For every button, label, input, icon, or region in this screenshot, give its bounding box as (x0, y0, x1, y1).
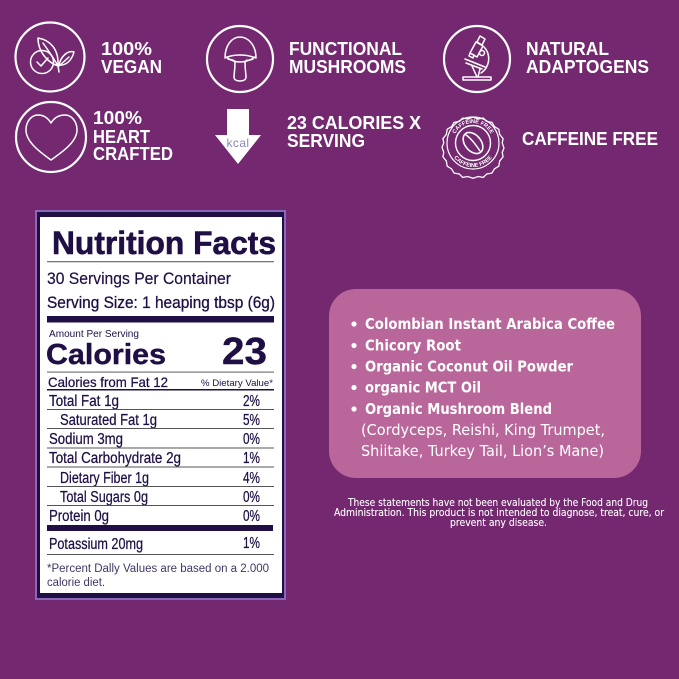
label: natural adaptogens: NATURAL (526, 39, 609, 59)
table: nutrient rows: Saturated Fat 1g (60, 412, 157, 429)
text: servings: 30 Servings Per Container (47, 269, 231, 288)
table: nutrient rows: 5% (243, 412, 260, 429)
badge: functional mushrooms (207, 26, 406, 92)
label: 100% vegan: 100% (101, 39, 152, 59)
list: ingredient bullets: Chicory Root (365, 336, 461, 354)
label: functional mushrooms (289, 39, 406, 77)
table: nutrient rows: Dietary Fiber 1g (60, 470, 149, 487)
text: calories (46, 328, 267, 373)
icon: vegan leaves (16, 22, 84, 92)
badge: 23 calories per serving (215, 109, 421, 164)
list: ingredient bullets: Organic Coconut Oil Powder (365, 358, 573, 376)
list: ingredient bullets: Organic Mushroom Blend (365, 400, 552, 418)
table: nutrient rows: 2% (243, 393, 260, 410)
table: nutrient rows: % Dietary Value* (201, 378, 273, 389)
icon: caffeine free seal: CAFFEINE FREE (454, 155, 492, 167)
label: 23 calories x serving (287, 113, 421, 151)
badge: natural adaptogens (444, 26, 649, 92)
table: nutrient rows: Total Carbohydrate 2g (49, 450, 181, 467)
label: natural adaptogens (526, 39, 649, 77)
label: caffeine free: CAFFEINE FREE (522, 129, 658, 149)
heading: nutrition facts: Nutrition Facts (52, 225, 276, 261)
label: 23 calories x serving: 23 CALORIES X (287, 113, 421, 133)
icon: down arrow with kcal: kcal (227, 136, 249, 150)
table: nutrient rows: Protein 0g (49, 508, 109, 525)
label: 100% vegan: VEGAN (101, 57, 162, 77)
icon: mushroom (207, 26, 273, 92)
icon: caffeine free seal: CAFFEINE FREE (452, 119, 494, 134)
badge: caffeine free (441, 116, 658, 179)
text: calories: Amount Per Serving (49, 328, 139, 340)
panel: ingredients (329, 289, 641, 478)
text: FDA disclaimer (334, 496, 664, 529)
table: nutrient rows: 0% (243, 508, 260, 525)
icon: microscope (444, 26, 510, 92)
table: nutrient rows: 4% (243, 470, 260, 487)
panel: nutrition facts label (35, 210, 286, 600)
table: nutrient rows: 0% (243, 489, 260, 506)
label: functional mushrooms: MUSHROOMS (289, 57, 406, 77)
text: servings: Serving Size: 1 heaping tbsp (6g) (47, 293, 275, 312)
list: ingredient bullets: (Cordyceps, Reishi, King Trumpet, (361, 421, 605, 439)
badge: 100% heart crafted (16, 102, 173, 172)
list: ingredient bullets: Colombian Instant Arabica Coffee (365, 315, 615, 333)
list: ingredient bullets: organic MCT Oil (365, 378, 481, 396)
text: footnote (47, 563, 269, 589)
table: nutrient rows (47, 374, 274, 555)
text: FDA disclaimer: prevent any disease. (450, 516, 547, 529)
table: nutrient rows: Total Fat 1g (49, 393, 119, 410)
label: 100% vegan (101, 39, 162, 77)
table: nutrient rows: 0% (243, 431, 260, 448)
label: 100% heart crafted (93, 108, 173, 164)
table: nutrient rows: 1% (243, 450, 260, 467)
table: nutrient rows: Potassium 20mg (49, 536, 143, 553)
label: 100% heart crafted: 100% (93, 108, 142, 128)
text: calories: Calories (46, 339, 166, 371)
text: calories: 23 (222, 331, 267, 373)
table: nutrient rows: Calories from Fat 12 (48, 374, 168, 390)
label: 100% heart crafted: CRAFTED (93, 144, 173, 164)
table: nutrient rows: Sodium 3mg (49, 431, 123, 448)
text: footnote: *Percent Dally Values are based on a 2.000 (47, 563, 269, 575)
table: nutrient rows: 1% (243, 535, 260, 552)
icon: caffeine free seal (441, 116, 505, 179)
label: functional mushrooms: FUNCTIONAL (289, 39, 402, 59)
list: ingredient bullets: Shiitake, Turkey Tail, Lion’s Mane) (361, 442, 604, 460)
icon: heart (16, 102, 86, 172)
table: nutrient rows: Total Sugars 0g (60, 489, 148, 506)
text: servings (47, 269, 275, 312)
list: ingredient bullets (351, 315, 615, 460)
label: 23 calories x serving: SERVING (287, 131, 365, 151)
text: footnote: calorie diet. (47, 577, 105, 589)
icon: down arrow with kcal (215, 109, 261, 164)
label: natural adaptogens: ADAPTOGENS (526, 57, 649, 77)
label: 100% heart crafted: HEART (93, 127, 150, 147)
badge: 100% vegan (16, 22, 162, 92)
